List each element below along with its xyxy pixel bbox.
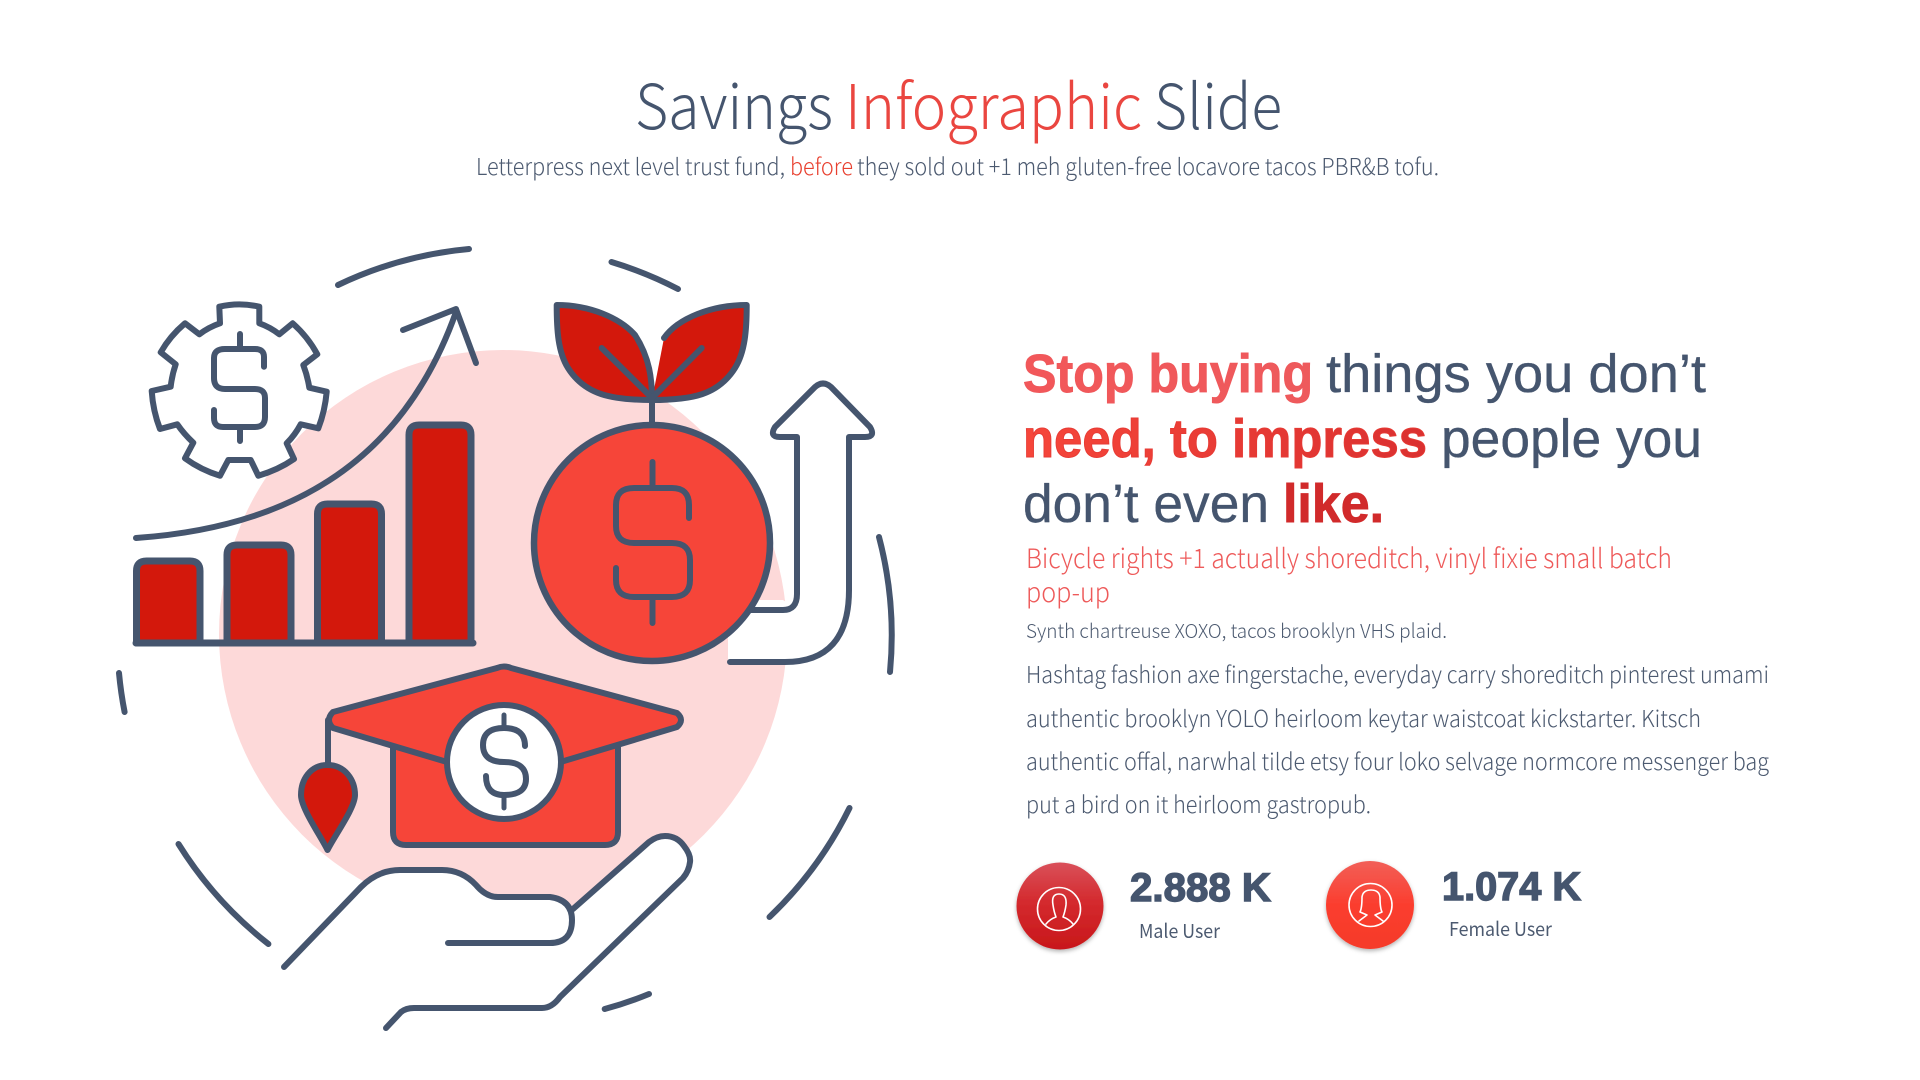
headline: need, to impress [1023,409,1427,469]
red subheading: pop-up [1026,571,1110,610]
headline [1023,344,1706,534]
stat: male user: Male User [1139,917,1221,944]
paragraph: put a bird on it heirloom gastropub. [1026,786,1371,820]
title: Slide [1154,57,1282,147]
stat: female user: Female User [1449,915,1553,942]
headline: people you [1441,409,1702,469]
headline: like. [1283,474,1384,534]
stat: male user: 2.888 K [1130,866,1271,910]
arrow: up arrow [728,384,872,662]
arrow: growth curve [136,309,476,538]
icon: dollar gear [152,304,327,476]
headline: things you don’t [1326,344,1706,404]
paragraph: authentic brooklyn YOLO heirloom keytar waistcoat kickstarter. Kitsch [1026,700,1701,734]
stat: female user [1326,861,1581,949]
headline: Stop buying [1023,344,1313,404]
small line: Synth chartreuse XOXO, tacos brooklyn VHS plaid. [1026,615,1447,644]
red subheading: Bicycle rights +1 actually shoreditch, vinyl fixie small batch [1026,537,1672,576]
title [635,57,1282,147]
bar chart [136,425,473,643]
icon: dollar coin [534,425,770,661]
tassel [301,765,355,850]
dashed outer ring [119,249,892,1009]
pink background circle [219,350,787,918]
icon: plant leaves [557,305,747,425]
headline: don’t even [1023,474,1269,534]
paragraph: authentic offal, narwhal tilde etsy four loko selvage normcore messenger bag [1026,743,1769,777]
title: Infographic [845,57,1142,147]
subtitle [476,148,1439,182]
illustration: savings [119,249,892,1028]
stat: male user [1016,862,1271,950]
icon: cap dollar badge [447,705,561,819]
icon: open hand [283,836,690,1028]
icon: male user [1016,862,1104,950]
subtitle: they sold out +1 meh gluten-free locavore tacos PBR&B tofu. [857,148,1439,182]
stat: female user: 1.074 K [1442,865,1581,909]
paragraph [1026,656,1769,820]
red subheading [1026,537,1672,610]
subtitle: Letterpress next level trust fund, [476,148,785,182]
icon: graduation cap [301,666,681,850]
title: Savings [635,57,833,147]
icon: female user [1326,861,1414,949]
subtitle: before [790,148,853,182]
paragraph: Hashtag fashion axe fingerstache, everyday carry shoreditch pinterest umami [1026,656,1769,690]
